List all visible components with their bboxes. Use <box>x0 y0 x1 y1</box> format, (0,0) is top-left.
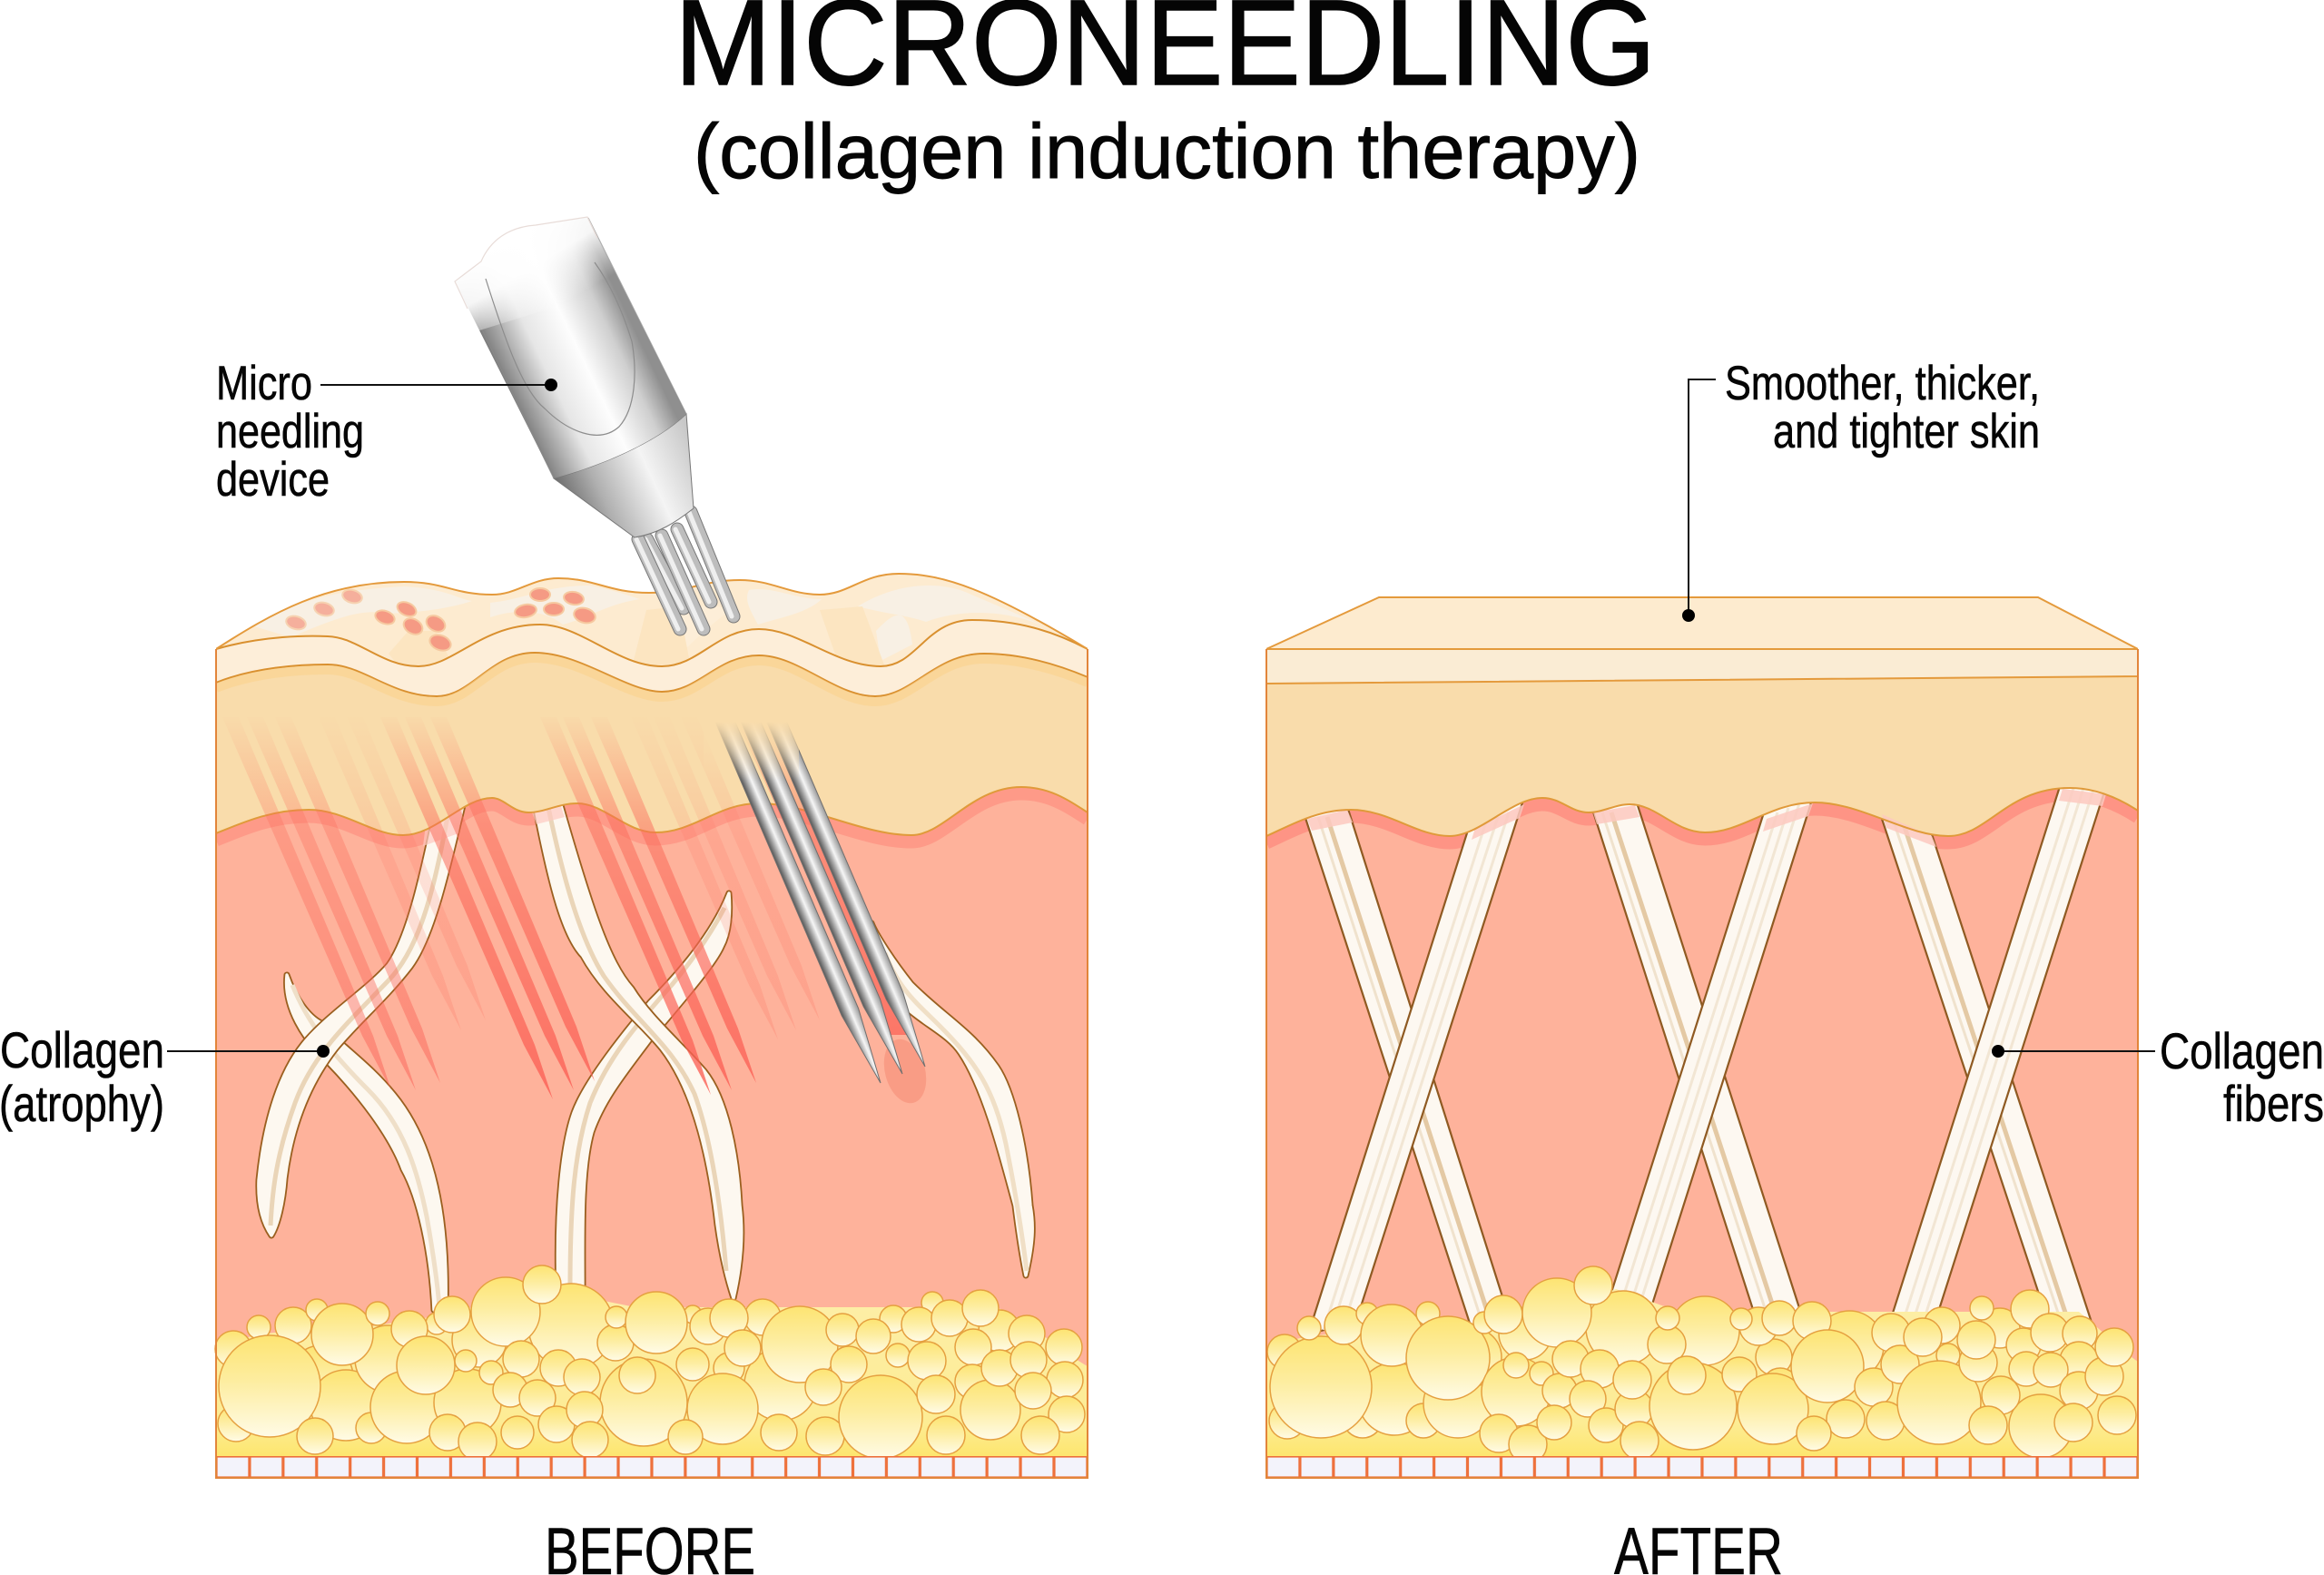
dermis layer <box>217 801 1087 1365</box>
skin top surface <box>1266 597 2138 649</box>
ascending fibers <box>1308 794 1525 1334</box>
label: collagen fibers <box>1992 1022 2324 1132</box>
device body <box>455 217 686 478</box>
atrophied collagen fibers <box>259 790 1032 1310</box>
epidermis band <box>1266 676 2138 836</box>
epidermis lower outline <box>216 787 1088 835</box>
label: micro needling device: Micro <box>216 357 312 410</box>
leader line <box>1998 1050 2155 1052</box>
label: smoother skin: and tighter skin <box>1773 405 2040 458</box>
panel outline <box>216 649 1088 1478</box>
red papillary band <box>216 793 1088 842</box>
label: micro needling device <box>216 357 557 507</box>
label: smoother skin <box>1682 357 2040 622</box>
collagen fibers <box>1304 781 2106 1344</box>
label: micro needling device: device <box>216 453 330 507</box>
label: collagen atrophy: Collagen <box>0 1021 164 1078</box>
ascending stripes <box>1324 785 2093 1330</box>
needles inside the skin <box>714 714 933 1087</box>
red papillary band <box>1266 794 2138 842</box>
surface patches <box>254 586 1044 661</box>
icon: microneedling device <box>455 217 734 629</box>
epidermis lower outline <box>1266 788 2138 836</box>
fat cells <box>215 1265 1085 1461</box>
basal cell row <box>216 1456 1088 1478</box>
epidermis band <box>216 653 1088 835</box>
descending fibers <box>1304 803 1512 1334</box>
skin top surface <box>222 575 1070 665</box>
panel: before skin cross-section <box>216 574 1088 1416</box>
panel: after subcutaneous fat <box>1266 649 2138 1478</box>
dermis layer <box>1266 781 2138 1380</box>
panel: after skin cross-section <box>1266 597 2138 1380</box>
fat base <box>1266 1289 2138 1456</box>
blush at needle tip <box>884 1039 926 1104</box>
subtitle: (collagen induction therapy) <box>694 109 1640 195</box>
red channel between needles <box>750 748 906 1035</box>
label: micro needling device: needling <box>216 405 364 458</box>
lesions on skin surface <box>285 587 597 654</box>
device inner contour <box>486 262 635 435</box>
panel outline <box>1266 649 2138 1478</box>
device cap outline <box>455 217 597 309</box>
leader line <box>1689 379 1716 615</box>
device pins <box>636 512 734 629</box>
stratum layer <box>1266 649 2138 684</box>
label: smoother skin: Smoother, thicker, <box>1725 357 2040 410</box>
label: collagen atrophy <box>0 1021 330 1132</box>
tan surface patches <box>389 606 885 667</box>
skin surface outline <box>216 574 1088 649</box>
injury streaks from needles <box>222 717 933 1107</box>
panel: before subcutaneous fat <box>215 649 1088 1478</box>
fiber top pink overlaps <box>423 810 463 846</box>
device right edge <box>468 218 686 478</box>
device neck <box>554 414 694 537</box>
descending stripes <box>1318 812 2073 1334</box>
basal cell row <box>1266 1456 2138 1478</box>
lower shading beneath stratum <box>216 658 1088 702</box>
stratum layer lower band <box>216 620 1088 696</box>
fat cells <box>1267 1266 2136 1463</box>
leader line <box>167 1050 323 1052</box>
needle fade at entry <box>714 713 799 777</box>
papillary overlap on fibers <box>1307 789 2106 847</box>
label: collagen atrophy: (atrophy) <box>0 1075 164 1132</box>
device cap fade <box>455 217 622 331</box>
leader line <box>320 384 551 386</box>
fat base <box>216 1289 1088 1456</box>
